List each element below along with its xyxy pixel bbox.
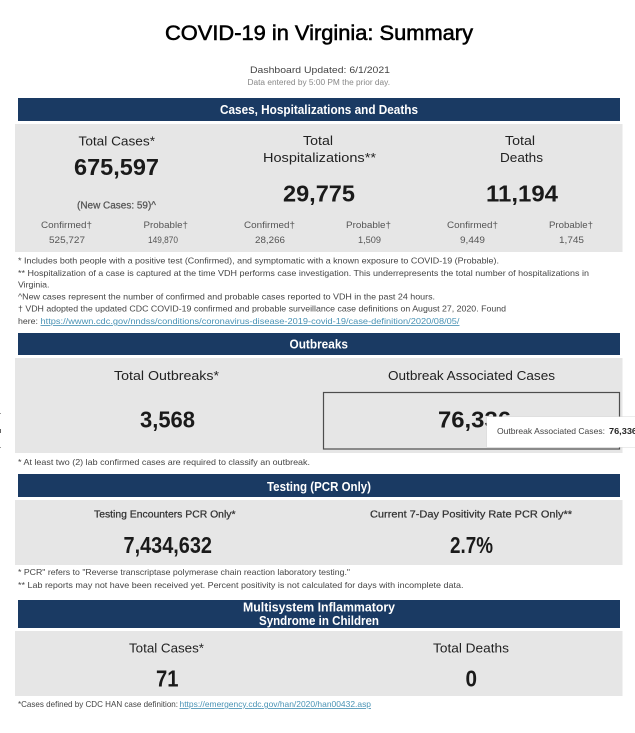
panel: cases, hospitalizations and deaths: [15, 124, 622, 252]
tooltip: outbreak associated cases: Outbreak Associated Cases:: [497, 426, 605, 436]
footnote: MIS-C case definition: *Cases defined by CDC HAN case definition:: [18, 699, 178, 709]
section header: outbreaks: Outbreaks: [290, 338, 348, 352]
section header: multisystem inflammatory syndrome in children: [18, 600, 620, 628]
MIS-C total cases metric: 71: [156, 666, 179, 692]
footnotes: cases section: [18, 256, 589, 326]
footnotes: cases section: https://wwwn.cdc.gov/nndss/conditions/coronavirus-disease-2019-covid-19/case-definition/2020/08/05/: [40, 316, 460, 326]
total cases metric: 675,597: [74, 154, 159, 180]
MIS-C total deaths metric: 0: [466, 666, 477, 692]
total deaths metric: 11,194: [486, 181, 558, 207]
total deaths metric: Probable†: [549, 220, 593, 230]
total hospitalizations metric: Hospitalizations**: [263, 150, 376, 165]
total deaths metric: 9,449: [460, 235, 485, 245]
total outbreaks metric: [114, 368, 219, 433]
dashboard update text: [248, 65, 390, 87]
MIS-C total cases metric: [129, 641, 204, 692]
footnote: MIS-C case definition: [18, 699, 371, 709]
panel: testing: [15, 500, 622, 565]
total deaths metric: Confirmed†: [447, 220, 498, 230]
dashboard update text: Data entered by 5:00 PM the prior day.: [248, 78, 390, 87]
tooltip: outbreak associated cases: [486, 416, 635, 448]
footnotes: cases section: * Includes both people with a positive test (Confirmed), and symptomatic with a known exposure to COVID-19 (Probable).: [18, 256, 499, 266]
testing encounters metric: Testing Encounters PCR Only*: [94, 509, 236, 521]
positivity rate metric: [370, 509, 572, 558]
tooltip: outbreak associated cases: 76,336: [609, 426, 635, 436]
total cases metric: (New Cases: 59)^: [77, 201, 156, 212]
panel: outbreaks: [15, 358, 622, 453]
panel: multisystem inflammatory syndrome in children: [15, 631, 622, 696]
footnote: outbreaks: * At least two (2) lab confirmed cases are required to classify an outbreak.: [18, 457, 310, 467]
total hospitalizations metric: Confirmed†: [244, 220, 295, 230]
footnotes: cases section: here:: [18, 316, 38, 326]
total hospitalizations metric: 29,775: [283, 181, 355, 207]
total hospitalizations metric: 1,509: [358, 235, 381, 245]
footnotes: testing: * PCR" refers to "Reverse transcriptase polymerase chain reaction laboratory testing.": [18, 567, 350, 577]
section header: outbreaks: [18, 333, 620, 355]
title: COVID-19 in Virginia: Summary: [165, 22, 474, 45]
section header: cases, hospitalizations and deaths: Cases, Hospitalizations and Deaths: [220, 103, 418, 117]
footnotes: cases section: † VDH adopted the updated CDC COVID-19 confirmed and probable surveillance case definitions on August 27, 2020. Found: [18, 304, 506, 314]
total cases metric: [41, 134, 188, 245]
total hospitalizations metric: Probable†: [346, 220, 391, 230]
footnotes: cases section: ^New cases represent the number of confirmed and probable cases reported to VDH in the past 24 hours.: [18, 291, 435, 301]
total cases metric: 149,870: [148, 235, 178, 245]
testing encounters metric: 7,434,632: [124, 532, 212, 558]
footnotes: testing: ** Lab reports may not have been received yet. Percent positivity is not calculated for days with incomplete data.: [18, 580, 464, 590]
section header: multisystem inflammatory syndrome in children: Multisystem Inflammatory: [243, 601, 395, 615]
MIS-C total deaths metric: Total Deaths: [433, 641, 510, 656]
total deaths metric: Total: [505, 133, 535, 148]
footnote: MIS-C case definition: https://emergency.cdc.gov/han/2020/han00432.asp: [180, 699, 371, 709]
total deaths metric: [447, 133, 593, 245]
total cases metric: Confirmed†: [41, 220, 92, 230]
total cases metric: Total Cases*: [78, 134, 155, 149]
section header: multisystem inflammatory syndrome in children: Syndrome in Children: [259, 614, 379, 628]
outbreak associated cases metric: [324, 368, 620, 449]
footnotes: cases section: Virginia.: [18, 280, 50, 290]
outbreak associated cases metric: Outbreak Associated Cases: [388, 368, 556, 383]
total cases metric: Probable†: [144, 220, 188, 230]
MIS-C total cases metric: Total Cases*: [129, 641, 204, 656]
dashboard update text: Dashboard Updated: 6/1/2021: [250, 65, 390, 76]
section header: cases, hospitalizations and deaths: [18, 98, 620, 121]
total outbreaks metric: Total Outbreaks*: [114, 368, 219, 383]
MIS-C total deaths metric: [433, 641, 510, 692]
total deaths metric: 1,745: [559, 235, 584, 245]
total cases metric: 525,727: [49, 235, 85, 245]
positivity rate metric: 2.7%: [450, 532, 493, 558]
positivity rate metric: Current 7-Day Positivity Rate PCR Only**: [370, 509, 572, 521]
section header: testing: [18, 474, 620, 497]
testing encounters metric: [94, 509, 236, 558]
footnotes: cases section: ** Hospitalization of a case is captured at the time VDH performs case investigation. This underrepresents the total number of hospitalizations in: [18, 268, 589, 278]
total deaths metric: Deaths: [500, 150, 544, 165]
footnotes: testing: [18, 567, 464, 590]
total hospitalizations metric: [244, 133, 391, 245]
total hospitalizations metric: 28,266: [255, 235, 285, 245]
section header: testing: Testing (PCR Only): [267, 480, 371, 494]
total outbreaks metric: 3,568: [140, 407, 195, 433]
total hospitalizations metric: Total: [303, 133, 333, 148]
outbreak associated cases metric: 76,336: [438, 407, 511, 433]
